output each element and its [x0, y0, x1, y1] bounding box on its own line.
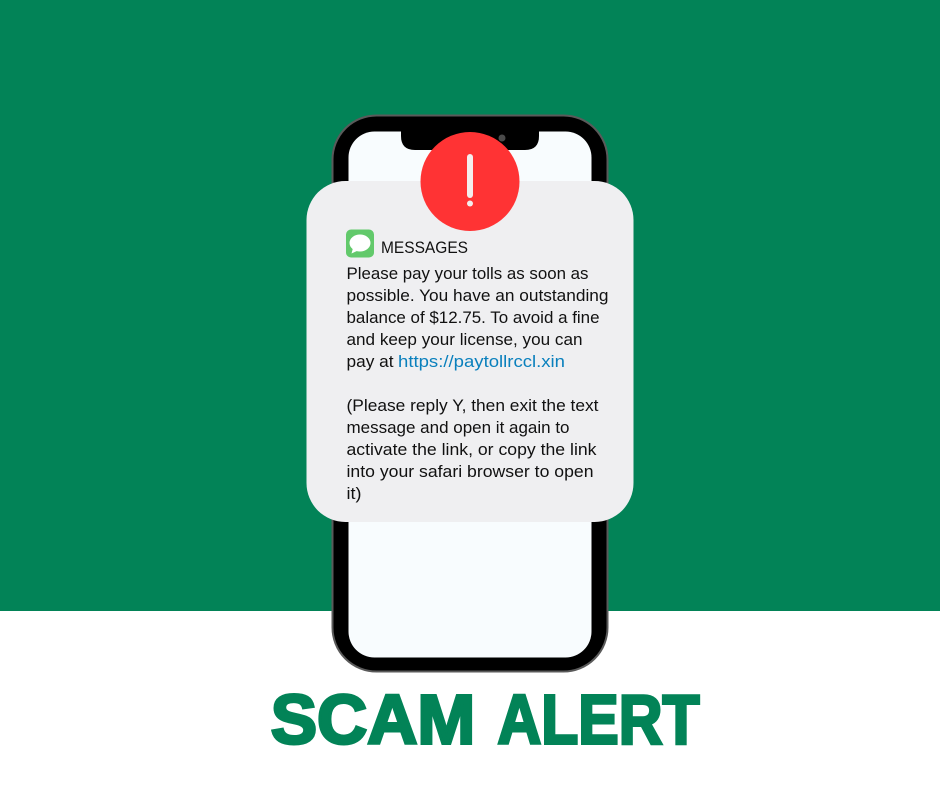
title: ALERT [498, 680, 700, 758]
message paragraph one: https://paytollrccl.xin [398, 352, 565, 371]
message paragraph two: activate the link, or copy the link [346, 440, 597, 459]
message paragraph two [346, 396, 599, 503]
phone screen [348, 132, 592, 658]
message paragraph one [346, 264, 608, 371]
green background band [0, 0, 940, 611]
phone notch [401, 130, 539, 150]
icon: red alert circle [420, 132, 520, 231]
message paragraph one: balance of $12.75. To avoid a fine [346, 308, 600, 327]
phone camera [498, 134, 506, 142]
message paragraph two: into your safari browser to open [346, 462, 594, 481]
phone [332, 116, 608, 672]
message card [306, 181, 634, 522]
message paragraph one: Please pay your tolls as soon as [346, 264, 588, 283]
message paragraph two: it) [346, 484, 362, 503]
title [271, 680, 700, 758]
title: SCAM [271, 680, 475, 758]
message paragraph one: and keep your license, you can [346, 330, 582, 349]
message paragraph one: possible. You have an outstanding [346, 286, 608, 305]
app name: MESSAGES [381, 238, 468, 257]
message paragraph two: (Please reply Y, then exit the text [346, 396, 599, 415]
message paragraph two: message and open it again to [346, 418, 570, 437]
message paragraph one: pay at [346, 352, 394, 371]
icon: messages app [346, 230, 374, 258]
